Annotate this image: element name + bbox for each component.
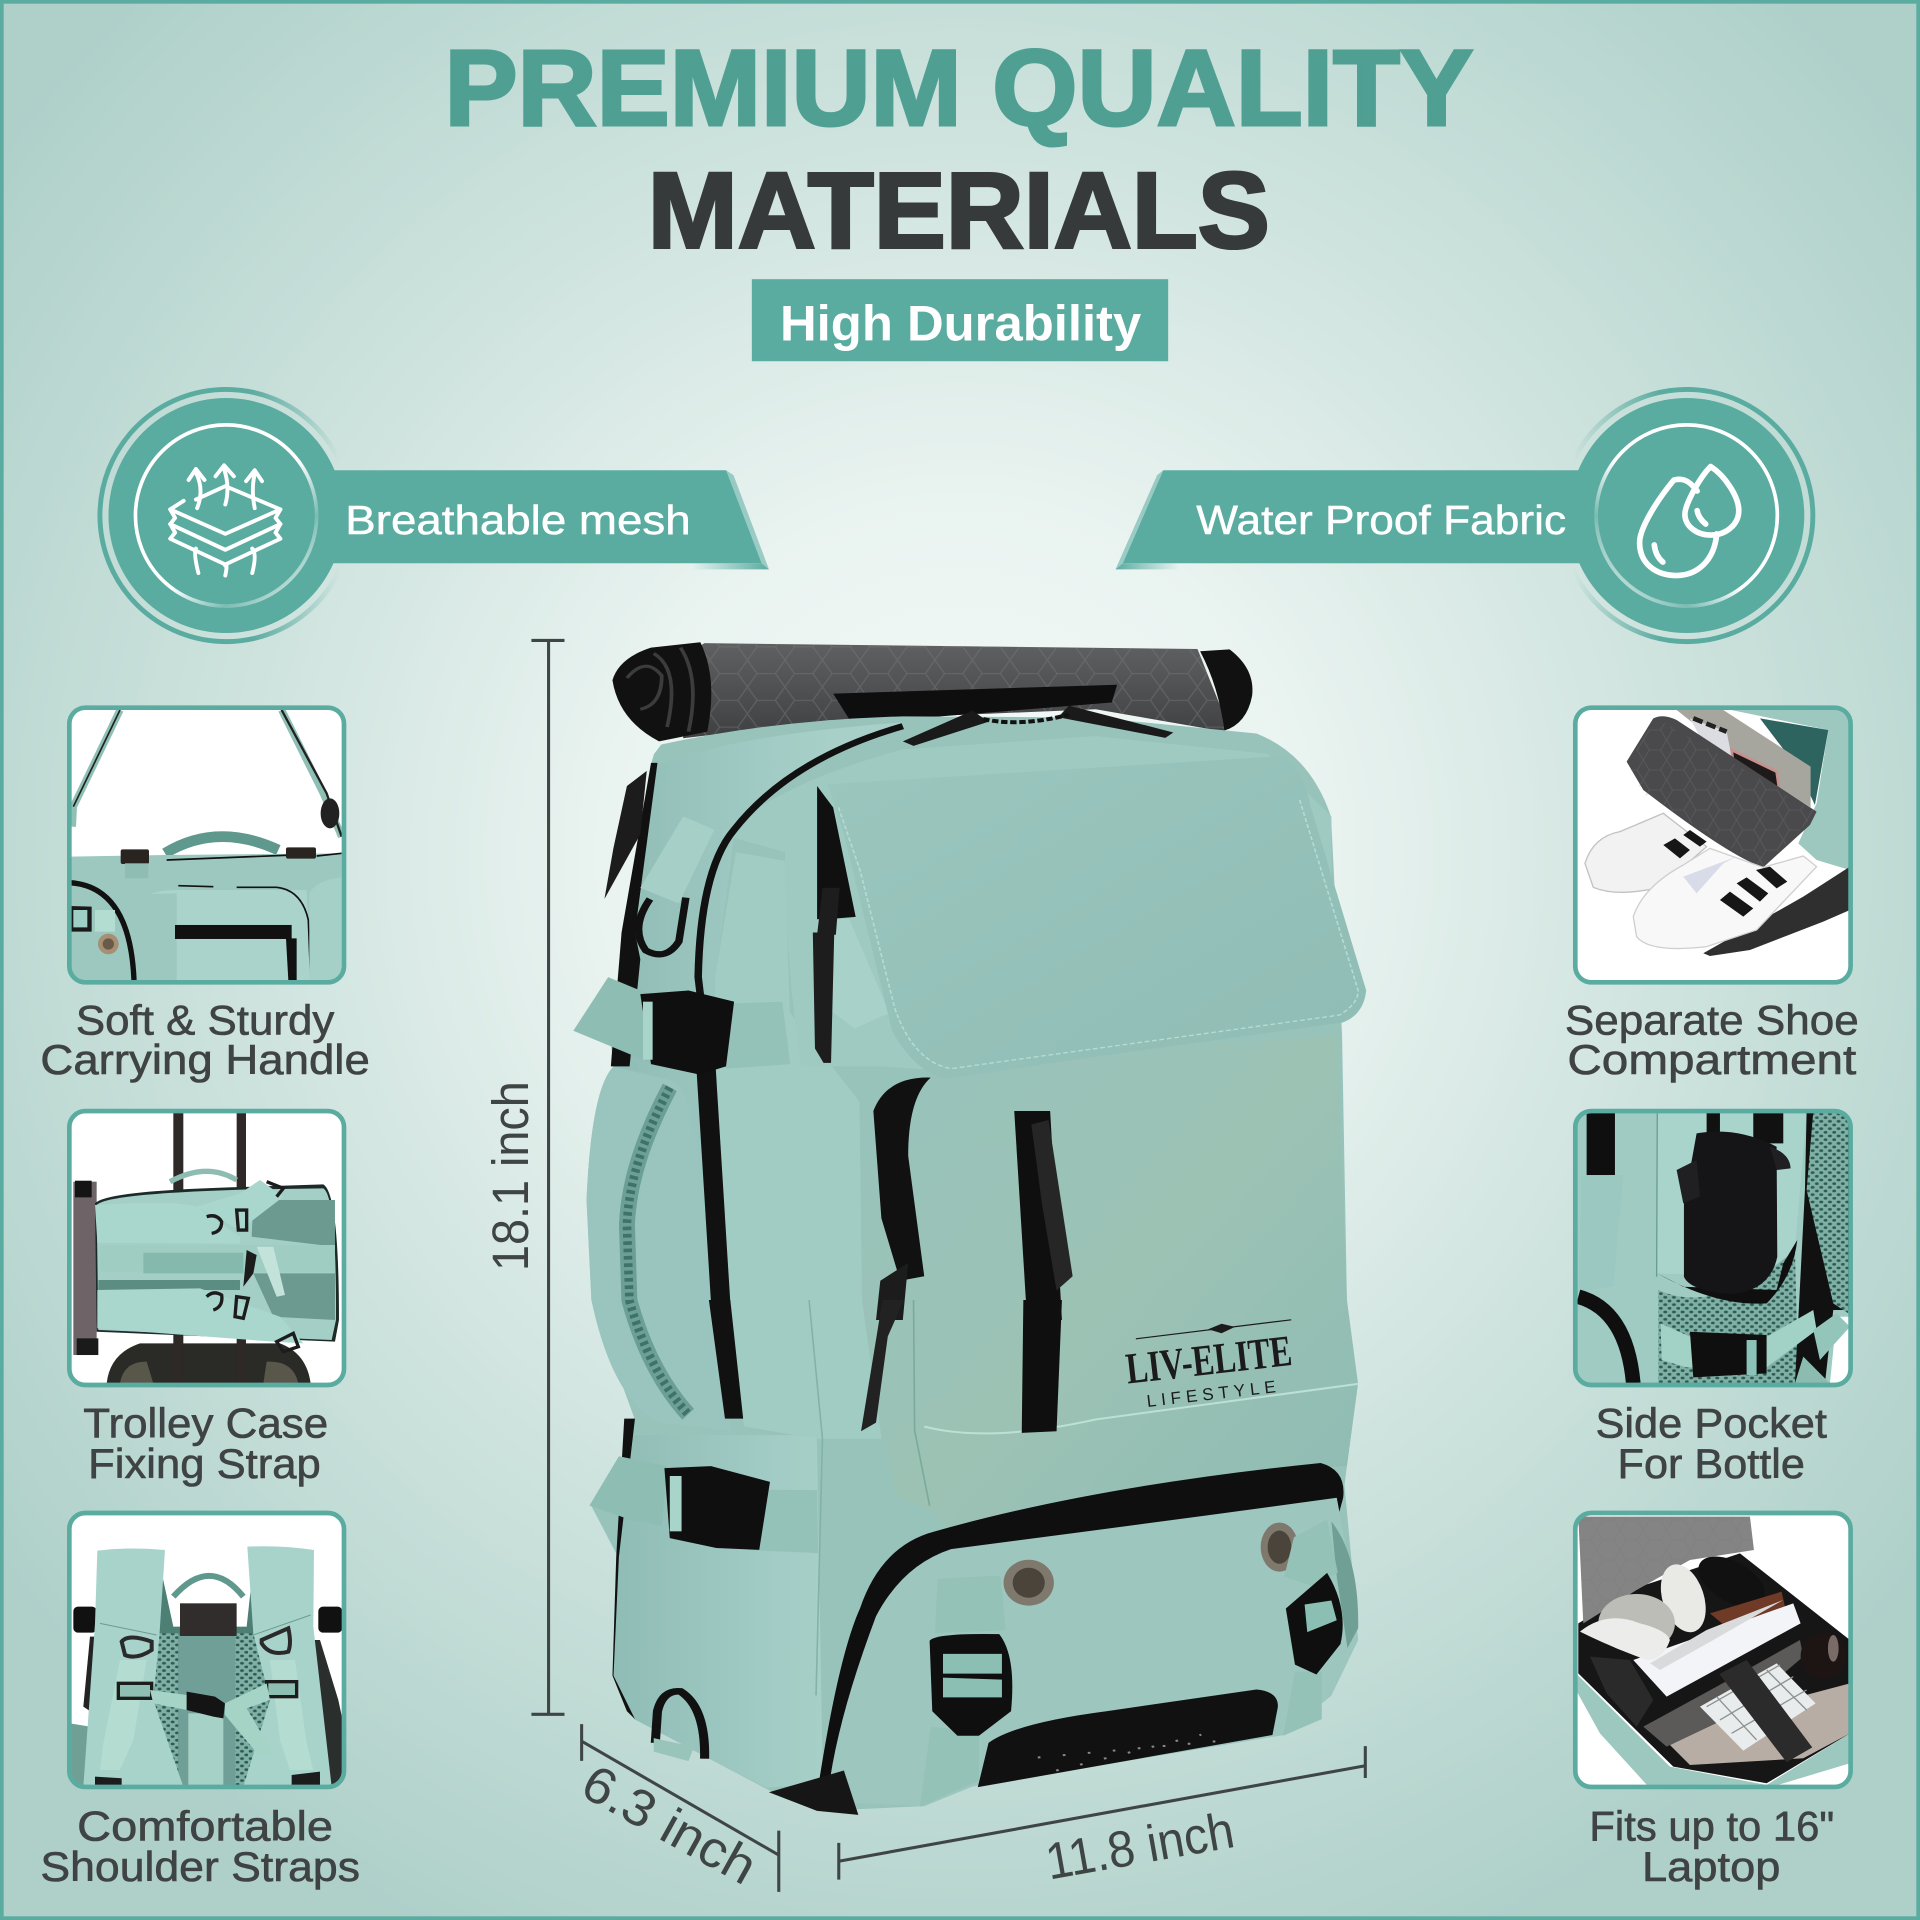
thumbnail: carrying handle	[68, 706, 345, 984]
backpack lower details	[589, 1300, 1358, 1815]
logo tagline: LIFESTYLE	[1146, 1376, 1277, 1411]
badge: high durability: High Durability	[780, 295, 1141, 351]
main backpack	[573, 642, 1366, 1815]
backpack body silhouette	[587, 716, 1358, 1811]
depth dimension: 6.3 inch: 6.3 inch	[573, 1753, 767, 1896]
caption: shoe compartment	[1565, 997, 1859, 1083]
backpack upper details	[573, 706, 1366, 1320]
height dimension: 18.1 inch: 18.1 inch	[481, 1081, 539, 1271]
caption: trolley strap	[83, 1400, 328, 1487]
side zipper pull	[604, 771, 647, 899]
front panel	[860, 1035, 1358, 1529]
logo text: LIV-ELITE	[1123, 1326, 1294, 1394]
thumbnail: bottle pocket	[1574, 1110, 1852, 1386]
rivets	[1004, 1523, 1298, 1606]
middle column panel	[715, 852, 882, 1439]
lower side buckle	[589, 1456, 818, 1553]
caption: shoe compartment: Compartment	[1567, 1036, 1857, 1083]
thumbnail: shoulder straps	[68, 1512, 345, 1788]
side bulge pocket	[587, 1067, 731, 1430]
callout: water proof fabric	[1116, 389, 1813, 642]
icon: breathable layers	[170, 465, 280, 576]
front zips	[873, 1078, 1073, 1320]
thumbnail: trolley strap	[68, 1110, 345, 1386]
upper side buckle	[573, 977, 790, 1074]
caption: trolley strap: Trolley Case	[83, 1400, 328, 1447]
caption: laptop compartment: Fits up to 16"	[1589, 1802, 1834, 1849]
callout: breathable mesh	[100, 389, 769, 642]
black base pad	[978, 1689, 1278, 1787]
caption: bottle pocket: For Bottle	[1618, 1440, 1805, 1487]
caption: carrying handle: Soft & Sturdy	[76, 997, 334, 1044]
front panel seams	[861, 1300, 1358, 1506]
brand logo	[1136, 1320, 1291, 1339]
caption: laptop compartment: Laptop	[1642, 1843, 1780, 1890]
d-ring loop	[639, 816, 714, 954]
caption: bottle pocket: Side Pocket	[1596, 1400, 1827, 1447]
title line: premium quality: PREMIUM QUALITY	[444, 27, 1473, 148]
caption: shoulder straps: Shoulder Straps	[40, 1843, 360, 1890]
caption: carrying handle: Carrying Handle	[40, 1036, 370, 1083]
captions	[40, 997, 1859, 1890]
badge: high durability	[752, 279, 1168, 361]
lower pocket	[818, 1463, 1358, 1806]
upper side panel	[612, 722, 902, 1320]
caption: bottle pocket	[1596, 1400, 1827, 1487]
caption: shoulder straps	[40, 1802, 360, 1890]
lower side panel	[613, 1435, 823, 1788]
width dimension: 11.8 inch	[839, 1746, 1365, 1890]
label: water proof fabric: Water Proof Fabric	[1196, 497, 1566, 543]
height dimension: 18.1 inch	[481, 640, 564, 1714]
thumbnail: laptop compartment	[1574, 1512, 1852, 1788]
caption: shoulder straps: Comfortable	[77, 1802, 333, 1849]
icon: water drops	[1640, 467, 1739, 576]
rolled top	[612, 642, 1252, 741]
front buckles and straps	[920, 1519, 1343, 1807]
flap	[817, 756, 1366, 1079]
label: breathable mesh: Breathable mesh	[345, 497, 691, 543]
bottom d-ring	[654, 1691, 705, 1761]
caption: trolley strap: Fixing Strap	[88, 1440, 321, 1487]
thumbnail: shoe compartment	[1574, 706, 1852, 984]
title	[444, 27, 1473, 270]
title line: materials: MATERIALS	[648, 149, 1270, 270]
top zipper pulls	[903, 706, 1173, 746]
caption: shoe compartment: Separate Shoe	[1565, 997, 1859, 1044]
width dimension: 11.8 inch: 11.8 inch	[1041, 1800, 1238, 1890]
pocket zipper pull	[813, 888, 840, 1063]
bottom zipper pull	[769, 1771, 858, 1815]
caption: laptop compartment	[1589, 1802, 1834, 1890]
caption: carrying handle	[40, 997, 370, 1083]
